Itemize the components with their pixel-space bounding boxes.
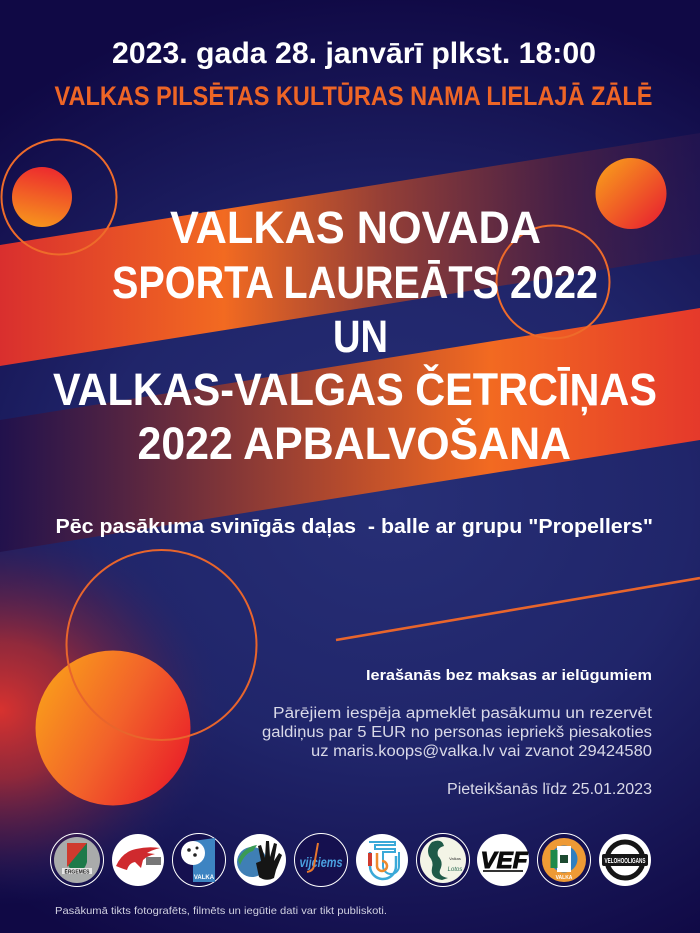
information text block: uz maris.koops@valka.lv vai zvanot 29424580 [311,743,652,760]
sponsor logo row [50,834,651,886]
logo: VEF: VEF [480,847,528,873]
diagonal band: lower orange [0,308,700,552]
decorative diagonal line [336,578,700,640]
diagonal band: upper orange [0,133,700,366]
logo: Lotos dragon [416,834,470,886]
information text block: Pārējiem iespēja apmeklēt pasākumu un rezervēt [273,705,653,722]
logo: Ērgļi shield grey [50,834,104,886]
information text block: Pieteikšanās līdz 25.01.2023 [447,781,652,798]
main title: UN [333,311,388,362]
logo: Lotos dragon: Lotos [448,867,462,873]
logo: florbola klubs Valka [172,834,226,886]
footer disclaimer: Pasākumā tikts fotografēts, filmēts un iegūtie dati var tikt publiskoti. [55,905,387,917]
information text block [262,667,653,798]
logo: Vijciems hockey [294,834,348,886]
logo: florbola klubs Valka: VALKA [194,875,215,881]
logo: VEF [477,834,529,886]
circle: ring behind title [496,226,610,338]
logo: volleyball hand [234,834,286,886]
subtitle: party note: Pēc pasākuma svinīgās daļas - balle ar grupu "Propellers" [56,516,653,538]
main title: VALKAS NOVADA [170,202,541,253]
circle group: bottom left [36,550,256,806]
date and time heading: 2023. gada 28. janvārī plkst. 18:00 [112,37,596,70]
logo: Valka football club [538,834,590,886]
main title [53,202,657,469]
information text block: Ierašanās bez maksas ar ielūgumiem [366,667,652,684]
information text block: galdiņus par 5 EUR no personas iepriekš piesakoties [262,724,652,741]
main title: VALKAS-VALGAS ČETRCĪŅAS [53,364,657,415]
logo: Velohooligans [599,834,651,886]
logo: Ērgļi shield grey: ĒRGEMES [64,868,90,876]
main title: SPORTA LAUREĀTS 2022 [112,257,598,308]
circle: top right filled [596,158,666,229]
logo: Velohooligans: VELOHOOLIGANS [604,856,646,865]
logo: Vijciems hockey: vijciems [300,854,343,870]
main title: 2022 APBALVOŠANA [138,418,571,469]
logo: red wings [112,834,164,886]
logo: sports school track [356,834,408,886]
logo: Valka football club: VALKA [556,875,573,881]
logo: Lotos dragon: Valkas [449,856,461,861]
circle group: top left [2,140,116,254]
